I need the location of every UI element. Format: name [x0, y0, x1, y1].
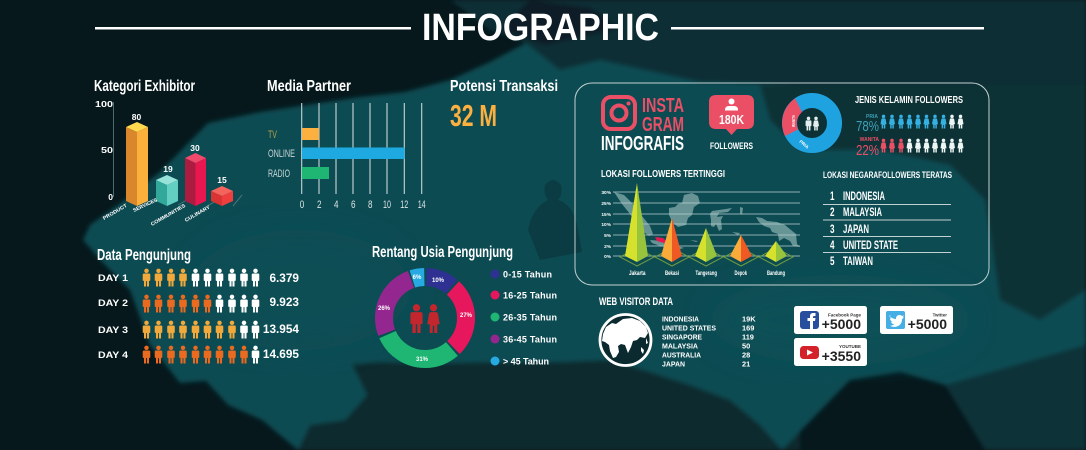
3d bar chart: 30 [190, 143, 200, 153]
donut chart: 31% [416, 357, 429, 363]
3d bar chart: 15 [217, 175, 227, 185]
card: facebook: Facebook Page [828, 312, 861, 318]
row: day 3: DAY 3 [98, 325, 128, 336]
row: day 4 [98, 346, 299, 364]
visitor table: JAPAN [662, 360, 685, 368]
chart: followers location map: Tangerang [696, 270, 717, 277]
list: top follower countries: INDONESIA [843, 191, 885, 203]
chart: followers location map: Jakarta [629, 270, 646, 277]
3d bar chart [95, 99, 242, 228]
horizontal bar chart: 8 [368, 199, 372, 211]
row: day 3 [98, 321, 299, 338]
chart: followers location map: Depok [734, 270, 747, 277]
heading: kategori exhibitor: Kategori Exhibitor [94, 78, 195, 95]
horizontal bar chart: RADIO [268, 168, 290, 180]
3d bar chart: COMMUNITIES [150, 203, 187, 228]
list: top follower countries [823, 170, 952, 268]
3d bar chart: 80 [132, 112, 141, 122]
row: day 2: DAY 2 [98, 298, 128, 309]
card: twitter: Twitter [933, 312, 947, 318]
donut chart: 6% [413, 275, 422, 281]
icon: globe [600, 314, 651, 366]
chart: followers location map: 10% [601, 222, 612, 228]
card: facebook: +5000 [822, 316, 861, 332]
heading: web visitor: WEB VISITOR DATA [599, 296, 673, 308]
gender donut: PRIA [798, 139, 810, 150]
gender followers pictogram: 22% [856, 142, 879, 159]
3d bar chart: 50 [101, 145, 113, 155]
3d bar chart: SERVICES [132, 197, 159, 214]
legend: 0-15 Tahun [503, 270, 552, 280]
row: day 3: 13.954 [263, 322, 299, 336]
chart: followers location map: 30% [601, 190, 612, 196]
heading: instagram infografis: INFOGRAFIS [601, 133, 684, 155]
horizontal bar chart: 12 [400, 199, 408, 211]
followers badge: FOLLOWERS [710, 141, 753, 151]
panel: potensi transaksi [450, 78, 558, 133]
list: top follower countries: 2 [830, 207, 834, 219]
title: INFOGRAPHIC [422, 7, 659, 49]
horizontal bar chart: TV [268, 129, 277, 141]
3d bar chart: PRODUCT [102, 203, 128, 222]
card: youtube: +3550 [822, 348, 861, 364]
gender followers pictogram: 78% [856, 118, 879, 135]
horizontal bar chart: 2 [317, 199, 322, 211]
gender donut: WANITA [791, 114, 796, 127]
panel: kategori exhibitor [94, 78, 242, 228]
followers badge: 180K [719, 112, 744, 127]
row: day 4: DAY 4 [98, 350, 129, 361]
heading: rentang usia: Rentang Usia Pengunjung [372, 244, 513, 261]
list: top follower countries: MALAYSIA [843, 207, 882, 219]
visitor table: 169 [742, 324, 754, 332]
panel: instagram infografis [575, 83, 989, 285]
chart: followers location map: 2% [604, 244, 612, 250]
heading: instagram infografis [601, 95, 684, 155]
card: facebook [794, 306, 867, 334]
horizontal bar chart: ONLINE [268, 148, 295, 160]
panel: web visitor data [599, 296, 756, 368]
heading: instagram infografis: INSTA [642, 95, 684, 117]
chart: followers location map: 0% [604, 254, 612, 260]
donut chart: 26% [378, 306, 391, 312]
heading: data pengunjung: Data Pengunjung [97, 247, 191, 264]
heading: instagram infografis: GRAM [642, 114, 684, 136]
3d bar chart: CULINARY [184, 204, 212, 224]
panel: media partner [267, 78, 426, 211]
gender followers pictogram: JENIS KELAMIN FOLLOWERS [855, 95, 963, 106]
visitor table: SINGAPORE [662, 332, 702, 342]
row: day 1 [98, 269, 299, 286]
list: top follower countries: 1 [830, 191, 835, 203]
donut chart: 10% [432, 278, 445, 284]
3d bar chart: 19 [163, 164, 173, 174]
icon: couple [410, 304, 440, 333]
gender followers pictogram [855, 95, 964, 159]
chart: followers location map: Bandung [767, 270, 785, 277]
horizontal bar chart: 6 [351, 199, 356, 211]
card: youtube [794, 338, 867, 366]
silhouette: figure [528, 180, 582, 260]
heading: lokasi followers: LOKASI FOLLOWERS TERTINGGI [601, 168, 725, 180]
chart: followers location map [601, 183, 800, 277]
visitor table: 119 [742, 332, 754, 342]
list: top follower countries: UNITED STATE [843, 240, 898, 252]
horizontal bar chart [268, 103, 426, 211]
visitor table: MALAYSIA [662, 342, 699, 350]
icon: instagram logo [603, 97, 635, 129]
card: twitter [880, 306, 953, 334]
list: top follower countries: 5 [830, 256, 835, 268]
gender followers pictogram: PRIA [866, 114, 878, 120]
horizontal bar chart: 4 [334, 199, 338, 211]
row: day 1: 6.379 [269, 271, 299, 285]
visitor table: AUSTRALIA [662, 350, 702, 360]
legend: > 45 Tahun [503, 356, 549, 366]
row: day 1: DAY 1 [98, 273, 129, 284]
chart: followers location map: 5% [604, 233, 612, 239]
legend: 26-35 Tahun [503, 312, 557, 322]
chart: followers location map: 15% [601, 212, 612, 218]
legend: 16-25 Tahun [503, 290, 557, 300]
row: day 2: 9.923 [269, 295, 299, 309]
list: top follower countries: JAPAN [843, 224, 869, 236]
visitor table: 19K [742, 314, 756, 324]
card: youtube: YOUTUBE [839, 344, 861, 349]
donut chart [378, 275, 473, 363]
panel: data pengunjung [97, 247, 299, 364]
horizontal bar chart: 0 [300, 199, 304, 211]
row: day 2 [98, 295, 299, 312]
list: top follower countries: LOKASI NEGARAFOLLOWERS TERATAS [823, 170, 952, 181]
legend [490, 270, 557, 366]
panel: rentang usia pengunjung [372, 244, 557, 366]
list: top follower countries: TAIWAN [843, 256, 873, 268]
heading: potensi transaksi: Potensi Transaksi [450, 78, 558, 95]
visitor table: 50 [742, 342, 750, 350]
chart: followers location map: 25% [601, 201, 612, 207]
value: 32 M: 32 M [450, 98, 497, 133]
3d bar chart: 100 [95, 99, 113, 109]
visitor table: 28 [742, 350, 750, 360]
heading: media partner: Media Partner [267, 78, 351, 95]
legend: 36-45 Tahun [503, 334, 557, 344]
list: top follower countries: 3 [830, 224, 834, 236]
gender followers pictogram: WANITA [860, 137, 879, 143]
3d bar chart: 0 [108, 192, 113, 202]
gender donut [782, 98, 834, 150]
horizontal bar chart: 14 [418, 199, 426, 211]
horizontal bar chart: 10 [383, 199, 391, 211]
donut chart: 27% [460, 313, 473, 319]
list: top follower countries: 4 [830, 240, 835, 252]
visitor table: UNITED STATES [662, 324, 716, 332]
visitor table [662, 314, 756, 368]
followers badge [709, 95, 754, 151]
visitor table: INDONESIA [662, 314, 700, 324]
chart: followers location map: Bekasi [665, 270, 679, 277]
card: twitter: +5000 [908, 316, 947, 332]
visitor table: 21 [742, 360, 750, 368]
row: day 4: 14.695 [263, 347, 299, 361]
